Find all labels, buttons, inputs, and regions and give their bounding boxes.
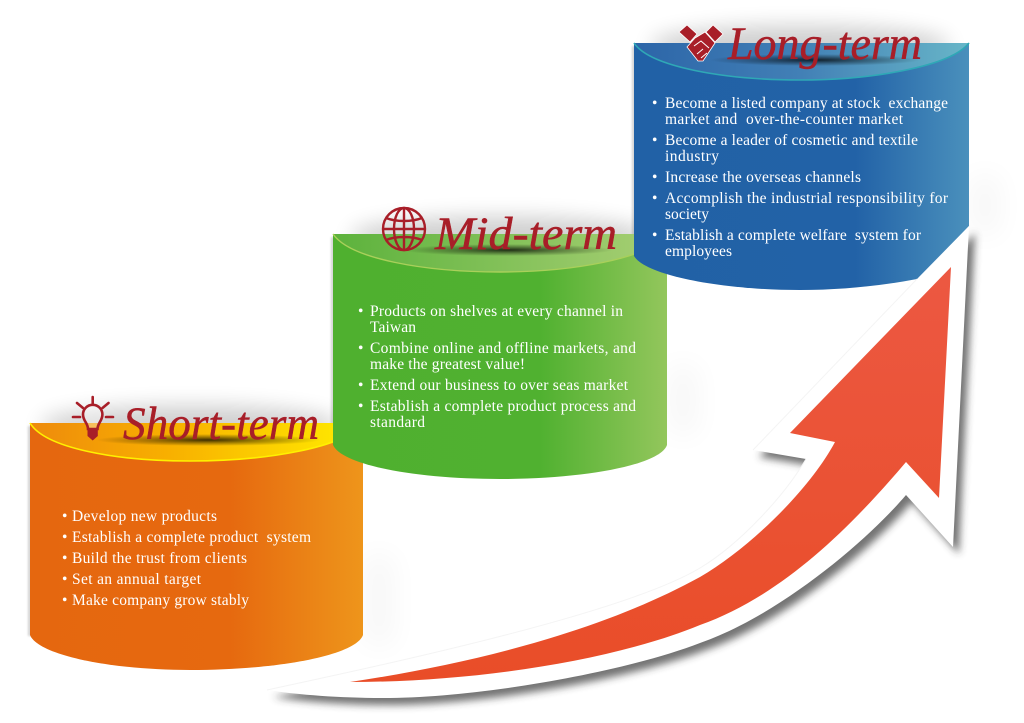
arrow: rising growth arrow bbox=[267, 226, 975, 705]
bullet list: long-term goals: industry bbox=[665, 148, 719, 165]
bullet list: long-term goals bbox=[652, 95, 949, 260]
bullet list: mid-term goals: make the greatest value! bbox=[370, 356, 525, 373]
bullet list: long-term goals: Become a leader of cosmetic and textile bbox=[665, 132, 918, 149]
bullet list: long-term goals: market and over-the-counter market bbox=[665, 111, 904, 128]
bullet list: long-term goals: Accomplish the industrial responsibility for bbox=[665, 190, 949, 207]
bullet list: mid-term goals: • bbox=[358, 398, 363, 415]
bullet list: long-term goals: Become a listed company at stock exchange bbox=[665, 95, 948, 112]
heading: Mid-term: Mid-term bbox=[434, 208, 617, 260]
bullet list: long-term goals: • bbox=[652, 132, 657, 149]
bullet list: short-term goals: Set an annual target bbox=[72, 571, 202, 588]
arrow upper edge line bbox=[267, 279, 917, 690]
bullet list: long-term goals: society bbox=[665, 206, 709, 223]
title shadow bbox=[710, 54, 920, 66]
bullet list: mid-term goals: Products on shelves at every channel in bbox=[370, 303, 623, 320]
bullet list: short-term goals: • bbox=[62, 571, 67, 588]
cylinder body: blue bbox=[634, 43, 969, 290]
arrow shadow bbox=[273, 233, 975, 705]
bullet list: short-term goals: Establish a complete product system bbox=[72, 529, 311, 546]
bullet list: short-term goals: Make company grow stably bbox=[72, 592, 249, 609]
icon: globe bbox=[383, 208, 425, 250]
icon: light bulb bbox=[73, 397, 113, 440]
cylinder body: green bbox=[333, 234, 667, 479]
bullet list: long-term goals: Increase the overseas channels bbox=[665, 169, 861, 186]
bullet list: mid-term goals: Extend our business to over seas market bbox=[370, 377, 629, 394]
icon: handshake bbox=[679, 25, 723, 61]
bullet list: short-term goals: Build the trust from clients bbox=[72, 550, 247, 567]
bullet list: short-term goals bbox=[62, 508, 311, 609]
cylinder rim bbox=[30, 423, 363, 461]
bullet list: mid-term goals: Establish a complete product process and bbox=[370, 398, 636, 415]
arrow outline: white bbox=[267, 226, 969, 698]
bullet list: short-term goals: Develop new products bbox=[72, 508, 217, 525]
heading: Long-term: Long-term bbox=[727, 18, 922, 70]
cylinder top: light blue bbox=[634, 43, 969, 80]
bullet list: long-term goals: Establish a complete welfare system for bbox=[665, 227, 922, 244]
bullet list: short-term goals: • bbox=[62, 592, 67, 609]
bullet list: short-term goals: • bbox=[62, 529, 67, 546]
bullet list: long-term goals: • bbox=[652, 190, 657, 207]
cylinder rim bbox=[333, 234, 667, 272]
bullet list: mid-term goals bbox=[358, 303, 636, 431]
panel: long-term cylinder bbox=[634, 18, 969, 290]
bullet list: mid-term goals: • bbox=[358, 377, 363, 394]
title shadow bbox=[403, 244, 613, 256]
bullet list: long-term goals: • bbox=[652, 95, 657, 112]
bullet list: long-term goals: • bbox=[652, 169, 657, 186]
panel: mid-term cylinder bbox=[333, 208, 667, 479]
bullet list: long-term goals: • bbox=[652, 227, 657, 244]
cylinder top: yellow bbox=[30, 423, 363, 461]
bullet list: long-term goals: employees bbox=[665, 243, 732, 260]
bullet list: mid-term goals: standard bbox=[370, 414, 425, 431]
bullet list: mid-term goals: • bbox=[358, 340, 363, 357]
bullet list: mid-term goals: Taiwan bbox=[370, 319, 416, 336]
bullet list: short-term goals: • bbox=[62, 508, 67, 525]
arrow body: red bbox=[350, 267, 951, 682]
heading: Short-term: Short-term bbox=[123, 398, 319, 450]
title shadow bbox=[96, 434, 320, 446]
bullet list: mid-term goals: Combine online and offline markets, and bbox=[370, 340, 636, 357]
cylinder body: orange bbox=[30, 423, 363, 670]
bullet list: mid-term goals: • bbox=[358, 303, 363, 320]
cylinder top: light green bbox=[333, 234, 667, 272]
bullet list: short-term goals: • bbox=[62, 550, 67, 567]
cylinder rim bbox=[634, 43, 969, 80]
panel: short-term cylinder bbox=[30, 397, 363, 670]
